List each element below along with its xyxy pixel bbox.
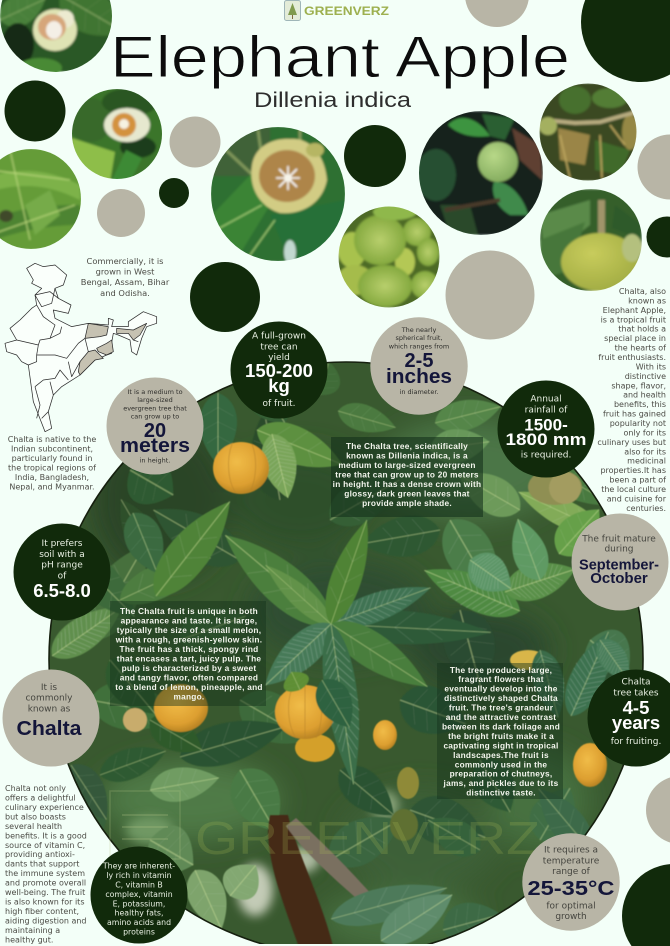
text: intro right: known as <box>628 296 666 305</box>
stat: maturity: The fruit mature <box>581 534 656 544</box>
overlay panel: flowers and uses: preparation of chutneys, <box>450 769 552 779</box>
stat: maturity: October <box>590 570 648 587</box>
text: intro right: With its <box>636 362 666 371</box>
overlay panel: fruit description: typically the size of a small melon, <box>117 625 261 635</box>
text: intro right: special place in <box>604 334 666 343</box>
overlay panel: flowers and uses: fragrant flowers that <box>458 674 544 684</box>
stat: height: evergreen tree that <box>123 404 187 412</box>
overlay panel: fruit description: The fruit has a thick, spongy rind <box>120 644 258 654</box>
text: intro right: also for its <box>624 447 666 456</box>
overlay panel: flowers and uses: between its dark foliage and <box>442 722 560 732</box>
photo: green fruit on tree <box>416 111 543 235</box>
stat: yield <box>230 322 328 418</box>
stat: fruit size <box>370 317 468 415</box>
overlay panel: fruit description <box>110 601 266 706</box>
text: health benefits: aiding digestion and <box>5 916 87 925</box>
stat: fruit size: spherical fruit, <box>395 334 443 342</box>
main photo outline <box>49 362 643 946</box>
text: intro right: culinary uses but <box>597 438 666 447</box>
stat: soil pH: pH range <box>41 560 83 570</box>
stat: height: can grow up to <box>131 412 179 420</box>
stat: rainfall: 1800 mm <box>506 430 586 449</box>
watermark <box>110 791 540 864</box>
stat: temperature: range of <box>552 867 591 877</box>
stat: maturity: during <box>604 544 634 554</box>
text: intro right: the hearts of <box>615 344 666 353</box>
stat: soil pH <box>14 524 110 620</box>
stat: fruiting time: Chalta <box>621 678 651 688</box>
stat: maturity <box>572 514 668 610</box>
fruit behind leaves <box>528 469 582 505</box>
background foliage <box>152 509 237 566</box>
stat: nutrients: healthy fats, <box>115 909 163 918</box>
stat: fruit size: 2-5 <box>405 350 433 372</box>
text: native range: Indian subcontinent, <box>11 444 93 454</box>
stat: rainfall: Annual <box>530 394 562 404</box>
stat: nutrients: complex, vitamin <box>105 890 173 899</box>
overlay panel: tree description: tree that can grow up to 20 meters <box>335 470 479 480</box>
decorative dark circle <box>4 80 66 142</box>
overlay panel: tree description: provide ample shade. <box>362 498 452 508</box>
stat: nutrients: E, potassium, <box>113 899 165 908</box>
stat: nutrients: amino acids and <box>107 918 171 927</box>
photo: bright green leaves <box>0 148 82 250</box>
overlay panel: flowers and uses: distinctively shaped Chalta <box>444 693 558 703</box>
overlay panel: flowers and uses <box>437 663 563 799</box>
stat: nutrients: They are inherent- <box>102 862 175 870</box>
stat: rainfall: 1500- <box>524 416 568 434</box>
text: health benefits: culinary experience <box>5 803 84 812</box>
photo: large yellow-green fruit <box>540 189 642 291</box>
text: intro right: and health <box>623 391 666 400</box>
stat: common name: known as <box>28 704 71 714</box>
overlay panel: flowers and uses: landscapes.The fruit is <box>453 750 549 760</box>
stat: fruit size: The nearly <box>401 326 436 334</box>
text: intro right: properties.It has <box>600 466 666 475</box>
decorative grey circle right <box>638 134 670 200</box>
logo <box>284 0 389 20</box>
text: health benefits: well-being. The fruit <box>5 888 85 897</box>
text: health benefits: high fiber content, <box>5 907 79 916</box>
text: intro right: fruit has gained <box>603 410 666 419</box>
foreground leaves <box>364 610 492 644</box>
stat: height <box>106 378 204 474</box>
stat: common name: Chalta <box>16 718 82 740</box>
overlay panel: tree description: known as Dillenia indica, is a <box>346 450 468 460</box>
stat: soil pH: of <box>58 571 67 581</box>
overlay panel: flowers and uses: jams, and pickles due to its <box>443 778 559 788</box>
text: health benefits: offers a delightful <box>5 794 76 802</box>
decorative grey circle <box>170 116 220 168</box>
title: Elephant Apple <box>110 25 570 90</box>
text: health benefits: providing antioxi- <box>5 850 75 859</box>
overlay panel: tree description: The Chalta tree, scientifically <box>346 441 468 451</box>
stat: nutrients: proteins <box>123 928 155 936</box>
overlay panel: fruit description: pulp is characterized by a sweet <box>122 663 256 673</box>
overlay panel: flowers and uses: distinctive taste. <box>466 788 536 798</box>
overlay panel: flowers and uses: The tree produces large, <box>450 665 552 675</box>
text: native range: India, Bangladesh, <box>15 473 89 482</box>
overlay panel: fruit description: appearance and taste. It is large, <box>121 615 257 625</box>
stat: fruiting time: for fruiting. <box>611 737 661 747</box>
stat: fruit size: inches <box>386 366 452 388</box>
stat: rainfall <box>498 380 594 478</box>
text: health benefits: but also boasts <box>5 812 66 821</box>
stat: yield: yield <box>268 353 290 363</box>
text: intro right: and cuisine for <box>607 494 667 504</box>
decorative dark circle <box>344 125 406 187</box>
stat: temperature: for optimal <box>546 901 596 911</box>
text: commercial regions: and Odisha. <box>100 288 150 298</box>
text: intro right: Elephant Apple, <box>603 306 666 315</box>
stat: yield: 150-200 <box>245 360 313 381</box>
text: intro right: that holds a <box>618 325 666 334</box>
stat: nutrients <box>90 846 188 944</box>
decorative dark circle bottom right <box>622 864 670 946</box>
stat: temperature: 25-35°C <box>528 878 614 900</box>
stat: temperature: temperature <box>543 856 600 866</box>
overlay panel: tree description: medium to large-sized evergreen <box>338 460 476 470</box>
text: native range: the tropical regions of <box>8 464 96 472</box>
stat: height: large-sized <box>137 396 173 404</box>
photo: branch with small fruit <box>539 83 638 181</box>
text: native range: Chalta is native to the <box>8 435 96 444</box>
photo: flower with bees <box>72 89 162 179</box>
stat: yield: kg <box>268 375 290 396</box>
watermark: GREENVERZ <box>195 812 540 864</box>
text: intro right: is a tropical fruit <box>601 315 666 324</box>
stat: yield: tree can <box>260 342 298 352</box>
text: health benefits: and promote overall <box>5 879 86 888</box>
text: intro right: shape, flavor, <box>611 381 666 390</box>
stat: height: 20 <box>144 420 166 442</box>
decorative dark circle <box>159 178 189 208</box>
text: health benefits: the immune system <box>5 869 85 878</box>
stat: nutrients: ly rich in vitamin <box>106 871 172 880</box>
overlay panel: flowers and uses: and the attractive contrast <box>446 712 556 722</box>
text: intro right: medicinal <box>627 457 666 466</box>
decorative grey circle top <box>465 0 529 27</box>
overlay panel: flowers and uses: captivating sight in tropical <box>443 740 559 750</box>
stat: temperature: It requires a <box>544 846 598 856</box>
orange fruits <box>213 442 269 494</box>
overlay panel: fruit description: with a rough, greenish-yellow skin. <box>115 634 262 644</box>
decorative dark circle <box>190 262 260 332</box>
stat: soil pH: soil with a <box>39 550 85 560</box>
stat: fruiting time: 4-5 <box>623 697 649 718</box>
text: intro right: benefits, this <box>614 400 666 409</box>
stat: fruit size: in diameter. <box>400 388 438 396</box>
text: intro right: fruit enthusiasts. <box>598 353 666 362</box>
stat: rainfall: is required. <box>521 450 571 460</box>
text: commercial regions: grown in West <box>96 266 155 276</box>
stat: fruiting time: tree takes <box>613 688 659 698</box>
decorative grey circle right lower <box>646 776 670 844</box>
stat: common name: commonly <box>25 694 73 704</box>
stat: soil pH: 6.5-8.0 <box>33 580 91 601</box>
stat: height: It is a medium to <box>127 388 183 396</box>
decorative dark circle top-right <box>581 0 670 82</box>
overlay panel: fruit description: that encases a tart, juicy pulp. The <box>117 653 261 663</box>
stat: temperature: growth <box>555 912 587 922</box>
overlay panel: flowers and uses: fruit. The tree's grandeur <box>449 703 554 713</box>
overlay panel: tree description: glossy, dark green leaves that <box>344 489 470 499</box>
stat: soil pH: It prefers <box>42 539 83 549</box>
stat: temperature <box>522 833 620 931</box>
text: intro right: been a part of <box>609 476 666 485</box>
stat: rainfall: rainfall of <box>525 405 568 415</box>
text: health benefits: is also known for its <box>5 898 84 906</box>
main photo circle: chalta tree <box>40 342 660 946</box>
text: health benefits: maintaining a <box>5 926 60 935</box>
stat: height: in height. <box>140 456 170 464</box>
overlay panel: flowers and uses: commonly used in the <box>455 759 547 769</box>
stat: nutrients: C, vitamin B <box>115 880 163 889</box>
text: health benefits: Chalta not only <box>5 784 66 793</box>
decorative dark circle right <box>646 216 670 258</box>
text: native range: particularly found in <box>12 454 92 463</box>
decorative grey circle <box>446 250 534 340</box>
overlay panel: flowers and uses: the bright fruits make it a <box>448 731 554 741</box>
text: intro right: popularity not <box>610 419 666 428</box>
stat: fruiting time <box>588 670 670 766</box>
text: intro right: centuries. <box>626 504 666 513</box>
stat: common name: It is <box>41 683 57 693</box>
leaves <box>338 402 396 433</box>
text: health benefits: benefits. It is a good <box>5 831 87 840</box>
text: health benefits: healthy gut. <box>5 935 53 944</box>
stat: yield: A full-grown <box>252 332 306 342</box>
overlay panel: fruit description: and tangy flavor, often compared <box>120 672 258 682</box>
overlay panel: fruit description: mango. <box>173 691 205 701</box>
stat: height: meters <box>120 435 190 457</box>
decorative grey circle <box>97 189 145 237</box>
text: health benefits: dants that support <box>5 860 79 869</box>
text: intro right: the local culture <box>601 485 666 494</box>
photo: flower top-left <box>0 0 112 72</box>
stat: yield: of fruit. <box>262 399 296 409</box>
text: intro right: Chalta, also <box>619 287 666 296</box>
text: native range: Nepal, and Myanmar. <box>9 482 95 492</box>
photo: pile of green fruits <box>337 204 440 308</box>
trunk <box>268 815 334 946</box>
stat: fruit size: which ranges from <box>389 342 449 350</box>
overlay panel: fruit description: The Chalta fruit is unique in both <box>120 606 258 616</box>
overlay panel: fruit description: to a blend of lemon, pineapple, and <box>115 682 263 692</box>
stat: fruiting time: years <box>612 712 660 733</box>
overlay panel: flowers and uses: eventually develop into the <box>444 684 558 694</box>
map of India <box>5 263 157 432</box>
text: intro right: distinctive <box>625 372 666 381</box>
text: commercial regions: Commercially, it is <box>87 256 163 266</box>
stat: common name <box>2 670 100 766</box>
stat: maturity: September- <box>579 556 659 574</box>
text: commercial regions: Bengal, Assam, Bihar <box>81 277 170 287</box>
text: health benefits: source of vitamin C, <box>5 841 85 850</box>
photo: large flower <box>210 126 346 264</box>
text: intro right: only for its <box>623 428 666 438</box>
overlay panel: tree description <box>331 437 483 517</box>
text: health benefits: several health <box>5 822 62 831</box>
subtitle: Dillenia indica <box>254 89 411 112</box>
logo: GREENVERZ <box>304 6 389 18</box>
overlay panel: tree description: in height. It has a dense crown with <box>333 479 481 489</box>
